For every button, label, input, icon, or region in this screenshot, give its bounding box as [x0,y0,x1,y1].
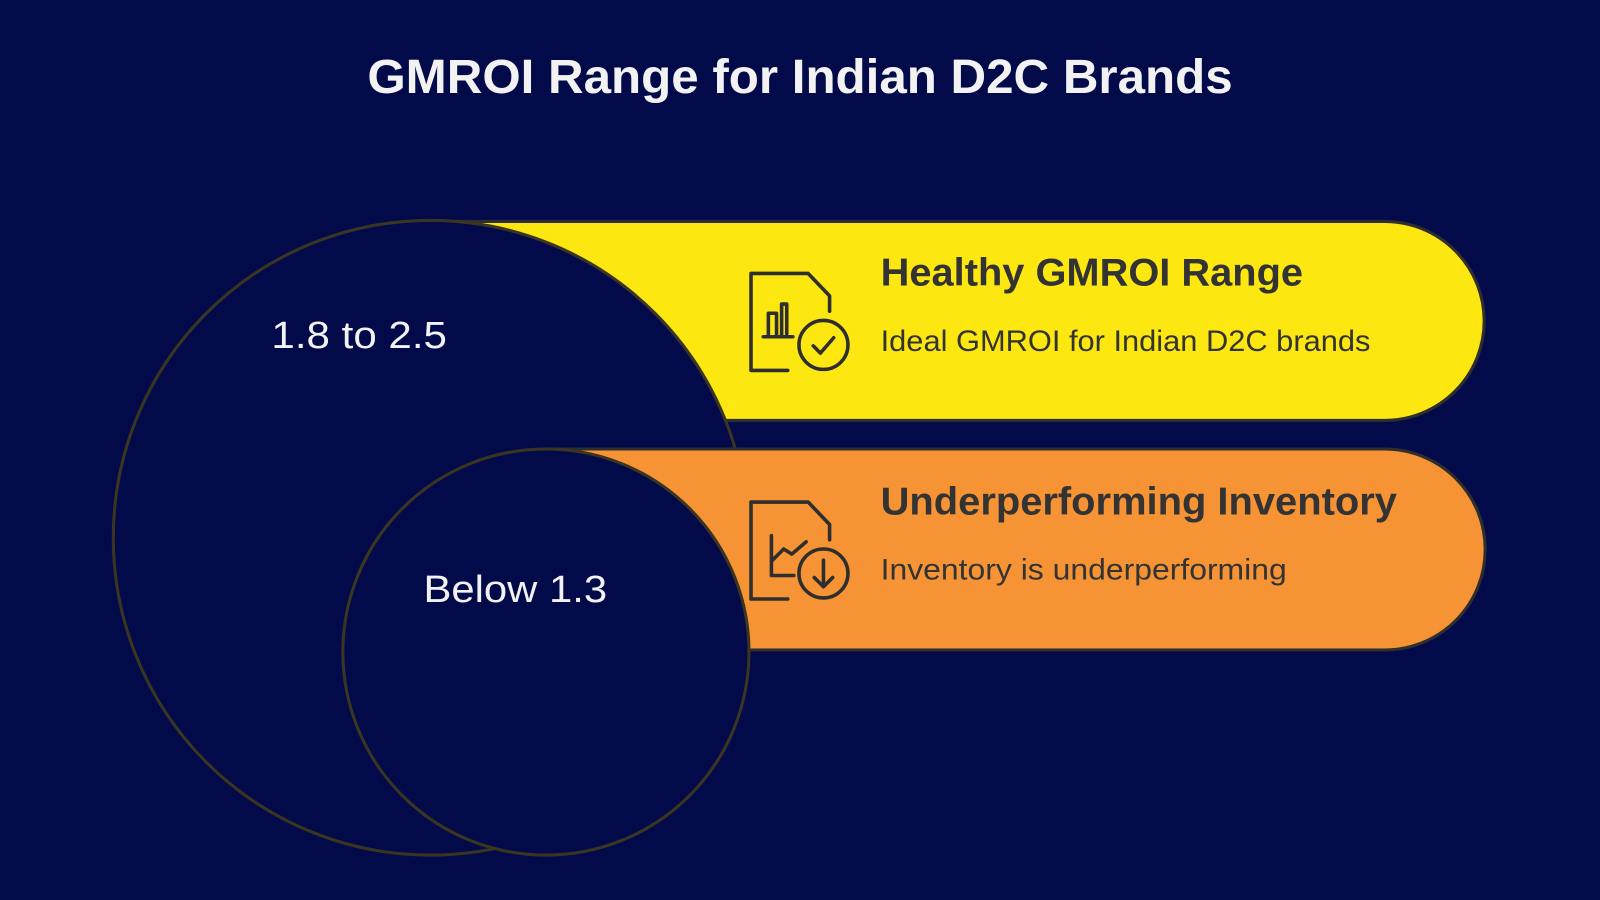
icon: report check [751,273,848,370]
heading: healthy: Healthy GMROI Range [881,252,1303,295]
text: underperforming desc: Inventory is underperforming [881,554,1287,587]
title: GMROI Range for Indian D2C Brands [367,51,1233,104]
value: healthy: 1.8 to 2.5 [271,314,447,356]
small circle [343,449,749,855]
heading: underperforming: Underperforming Inventory [881,480,1397,523]
value: below: Below 1.3 [423,568,607,610]
band: healthy [429,221,1484,420]
text: healthy desc: Ideal GMROI for Indian D2C brands [881,325,1370,358]
icon: report down [751,502,848,599]
big circle [113,220,748,855]
band: underperforming [551,449,1485,650]
